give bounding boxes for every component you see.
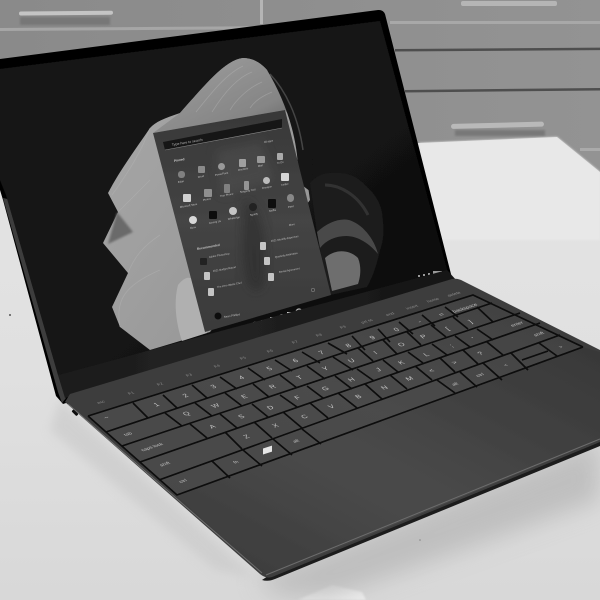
recommended list: [197, 222, 300, 296]
function row labels: F9: [339, 325, 348, 329]
key labels: 6: [292, 358, 300, 364]
function row labels: F2: [156, 382, 165, 386]
key labels: O: [397, 342, 408, 348]
pinned apps: Spotify: [250, 211, 259, 217]
pinned apps: Groupon: [262, 184, 273, 190]
key labels: 2: [182, 393, 190, 399]
key labels: ctrl: [178, 478, 189, 484]
key labels: B: [354, 394, 364, 400]
key labels: ctrl: [475, 372, 486, 378]
pinned apps: Among Us: [209, 219, 222, 225]
key labels: F: [293, 395, 303, 401]
key labels: J: [375, 367, 383, 373]
palm rest: [177, 347, 600, 576]
key labels: ?: [477, 351, 485, 357]
key labels: shift: [533, 331, 547, 338]
windows key icon: [263, 446, 272, 455]
function row labels: home: [426, 297, 441, 303]
key labels: 3: [210, 384, 218, 390]
usb port: [71, 409, 79, 416]
key labels: =: [437, 312, 446, 318]
key labels: fn: [232, 460, 241, 465]
key labels: >: [450, 360, 459, 366]
key labels: alt: [292, 438, 302, 444]
pinned apps: [174, 138, 294, 230]
recommended list: 2021 Monthly Expenses: [271, 234, 299, 243]
key labels: >: [558, 345, 565, 350]
pinned apps: Microsoft Store: [180, 202, 198, 209]
pinned apps: Mail: [258, 163, 263, 168]
pinned apps: To Do: [277, 160, 284, 165]
key labels: 9: [369, 335, 377, 341]
pinned apps: Netflix: [269, 208, 277, 213]
function row labels: F1: [127, 391, 136, 395]
pinned apps: PowerPoint: [215, 171, 229, 177]
key labels: shift: [159, 461, 173, 468]
pinned apps: Edge: [178, 179, 185, 184]
key labels: <: [503, 363, 510, 368]
key labels: <: [427, 368, 436, 374]
laptop lid: [0, 10, 457, 404]
recommended list: Adobe Photoshop: [209, 251, 230, 259]
search bar: Type here to search: [172, 138, 203, 147]
kitchen cabinets background: [0, 0, 600, 200]
key labels: L: [423, 352, 431, 358]
recommended list: Recommended: [197, 243, 220, 251]
function row labels: delete: [446, 291, 462, 297]
key labels: 0: [393, 327, 401, 333]
key labels: -: [416, 319, 424, 325]
function row labels: F7: [291, 340, 300, 344]
key labels: alt: [451, 381, 461, 387]
key labels: H: [347, 377, 357, 383]
keyboard deck: [65, 279, 600, 581]
key labels: Z: [242, 434, 252, 440]
key labels: U: [347, 358, 357, 364]
pinned apps: Word: [198, 174, 205, 179]
wallpaper: dark bloom: [267, 70, 383, 295]
key labels: 7: [318, 350, 326, 356]
search bar: [163, 119, 282, 150]
key labels: caps lock: [140, 442, 165, 453]
pinned apps: WhatsApp: [228, 215, 241, 221]
pinned apps: Xbox: [190, 225, 197, 230]
pinned apps: Twitter: [281, 182, 289, 187]
function row labels: F5: [239, 356, 248, 360]
key labels: backspace: [451, 302, 480, 314]
function row labels: F6: [266, 349, 275, 353]
key labels: 5: [266, 366, 274, 372]
keys: [88, 295, 583, 495]
screen: [0, 21, 447, 375]
key labels: Y: [321, 366, 331, 372]
key labels: A: [208, 424, 218, 430]
key labels: X: [271, 423, 281, 429]
key labels: G: [321, 386, 331, 392]
key labels: 8: [345, 343, 353, 349]
lower bezel: [58, 270, 457, 398]
system tray: [418, 271, 442, 277]
key labels: Q: [182, 411, 193, 417]
key labels: W: [210, 403, 222, 409]
pinned apps: Your Phone: [220, 192, 234, 198]
key labels: [102, 302, 565, 484]
key labels: E: [240, 394, 250, 400]
wallpaper: light bloom: [103, 58, 310, 350]
pinned apps: Snipping Tool: [240, 187, 256, 194]
key labels: C: [300, 414, 310, 420]
function row labels: F3: [185, 373, 194, 377]
key labels: [: [445, 327, 451, 332]
recommended list: More: [289, 222, 296, 227]
key labels: D: [266, 405, 276, 411]
function row labels: end: [384, 311, 396, 317]
key labels: ]: [468, 320, 474, 325]
key labels: ~: [102, 415, 111, 421]
key labels: I: [373, 351, 379, 356]
start menu panel: [153, 110, 331, 332]
pinned apps: Paint: [288, 204, 294, 209]
recommended list: The Zero Waste Chef: [217, 281, 242, 289]
key labels: R: [268, 384, 278, 390]
key labels: V: [327, 404, 337, 410]
pinned apps: OneNote: [238, 166, 249, 172]
function row labels: prt sc: [360, 318, 375, 324]
pinned apps: All apps: [264, 138, 274, 144]
key labels: 1: [153, 402, 161, 408]
user and power: [214, 288, 315, 320]
function row labels: [96, 291, 462, 405]
key labels: ': [471, 337, 477, 341]
user and power: Sean Phillips: [224, 312, 241, 319]
key labels: enter: [510, 321, 525, 328]
key labels: 4: [238, 375, 246, 381]
key labels: P: [419, 334, 429, 340]
key labels: T: [295, 375, 305, 381]
recommended list: 2021 Budget Report: [213, 265, 236, 273]
function row labels: insert: [405, 304, 420, 310]
function row labels: F4: [213, 364, 222, 368]
key labels: ;: [449, 344, 455, 349]
recommended list: Rental Agreement: [279, 266, 300, 274]
key labels: K: [397, 360, 407, 366]
key labels: tab: [123, 431, 134, 437]
countertop: [0, 137, 600, 600]
pinned apps: Pinned: [174, 157, 185, 163]
key labels: S: [237, 414, 247, 420]
function row labels: F8: [315, 333, 324, 337]
taskbar icons: [243, 309, 302, 332]
key labels: N: [380, 385, 390, 391]
key labels: M: [405, 376, 416, 382]
pinned apps: Photos: [203, 196, 212, 202]
recommended list: Quarterly Estimates: [275, 251, 298, 259]
function row labels: esc: [96, 399, 107, 405]
